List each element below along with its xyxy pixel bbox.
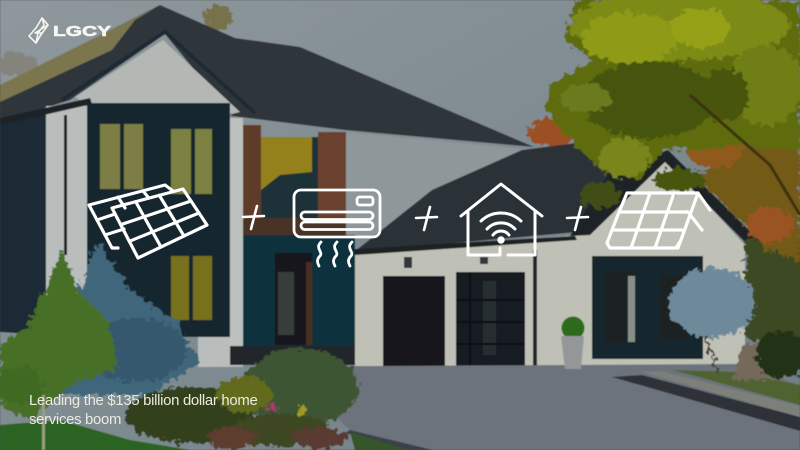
icon: air conditioner [294, 190, 380, 266]
roof: sunlit section [0, 7, 157, 102]
garden foliage [0, 242, 800, 449]
icon: plus [567, 207, 588, 230]
house: garage doors [383, 272, 525, 367]
driveway [210, 364, 800, 450]
icon: logo bolt [29, 18, 48, 43]
house: left brick wall [0, 112, 46, 335]
large yellow-green tree [545, 0, 800, 262]
house: lamps [404, 257, 488, 268]
house: garage wing wall [355, 158, 745, 366]
house: garage roof [354, 141, 612, 252]
lawn [0, 395, 408, 450]
icon: solar panels [89, 185, 207, 258]
house: main roof [0, 5, 534, 147]
tagline: services boom [29, 412, 121, 428]
logo wordmark: LGCY [53, 24, 111, 40]
house: right window [592, 256, 703, 359]
icon: roof tiles [607, 193, 710, 248]
icon: plus [416, 207, 437, 230]
planter [561, 316, 584, 369]
house: centre section [346, 132, 536, 240]
tagline: Leading the $135 billion dollar home [29, 393, 257, 409]
house: gable wall [75, 40, 240, 114]
icon: plus [243, 206, 264, 229]
background trees [0, 5, 576, 147]
icon: smart home wifi [461, 184, 542, 255]
tagline [29, 393, 258, 428]
background trees: far right [745, 240, 800, 340]
house: window column [87, 103, 230, 337]
